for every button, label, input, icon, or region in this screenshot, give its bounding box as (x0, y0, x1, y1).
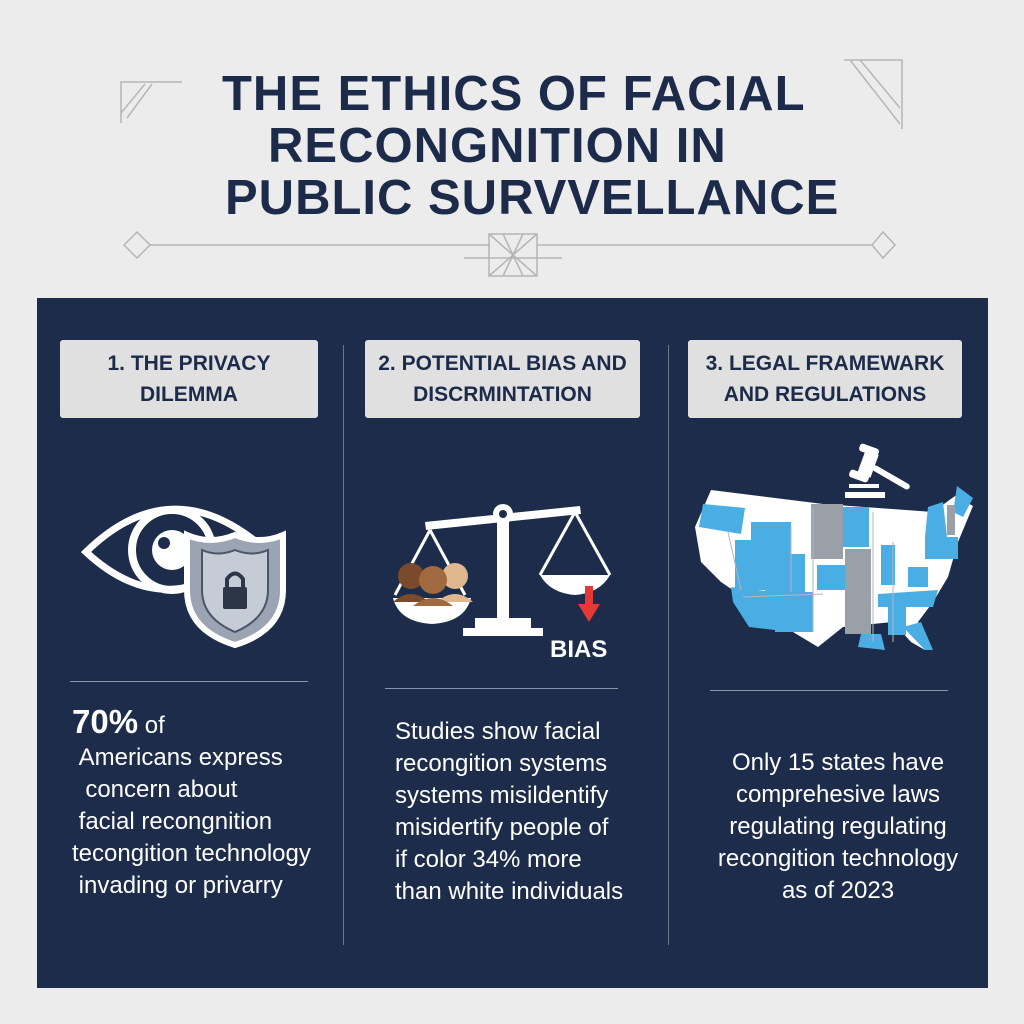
header: privacy: DILEMMA (140, 383, 238, 406)
header: legal: AND REGULATIONS (724, 383, 926, 406)
text: bias stat: than white individuals (395, 878, 623, 905)
header: legal (688, 340, 962, 418)
header: bias (365, 340, 640, 418)
text: bias stat: systems misildentify (395, 782, 608, 809)
decorative title frame (120, 59, 903, 277)
text: privacy stat (72, 703, 311, 899)
text: PUBLIC SURVVELLANCE (225, 171, 839, 225)
text: THE ETHICS OF FACIAL (222, 67, 806, 121)
separators (70, 681, 308, 682)
text: privacy stat: invading or privarry (79, 872, 283, 899)
text: bias stat: misidertify people of (395, 814, 608, 841)
header: privacy (60, 340, 318, 418)
main panel (37, 298, 988, 988)
icon: gavel (845, 444, 910, 498)
bias label: BIAS (550, 636, 607, 663)
text: privacy stat: Americans express (79, 744, 283, 771)
header: legal: 3. LEGAL FRAMEWARK (706, 352, 944, 375)
header: bias: 2. POTENTIAL BIAS AND (378, 352, 627, 375)
text: privacy stat: concern about (85, 776, 237, 803)
header: privacy: 1. THE PRIVACY (108, 352, 270, 375)
text: bias stat: recongition systems (395, 750, 607, 777)
title (222, 67, 839, 225)
map: US states (695, 486, 973, 650)
text: legal stat: comprehesive laws (736, 781, 940, 808)
text: privacy stat: 70% of (72, 703, 165, 740)
text: legal stat: as of 2023 (782, 877, 894, 904)
text: bias stat: if color 34% more (395, 846, 582, 873)
icon: scales with bias (393, 504, 612, 636)
text: legal stat: Only 15 states have (732, 749, 944, 776)
text: legal stat: regulating regulating (729, 813, 947, 840)
text: privacy stat: facial recongnition (79, 808, 272, 835)
header: bias: DISCRMINTATION (413, 383, 592, 406)
icon: eye with shield (81, 506, 286, 648)
text: legal stat (718, 749, 958, 904)
text: bias stat (395, 718, 623, 905)
text: bias stat: Studies show facial (395, 718, 600, 745)
text: privacy stat: tecongition technology (72, 840, 311, 867)
text: legal stat: recongition technology (718, 845, 958, 872)
text: RECONGNITION IN (268, 119, 727, 173)
